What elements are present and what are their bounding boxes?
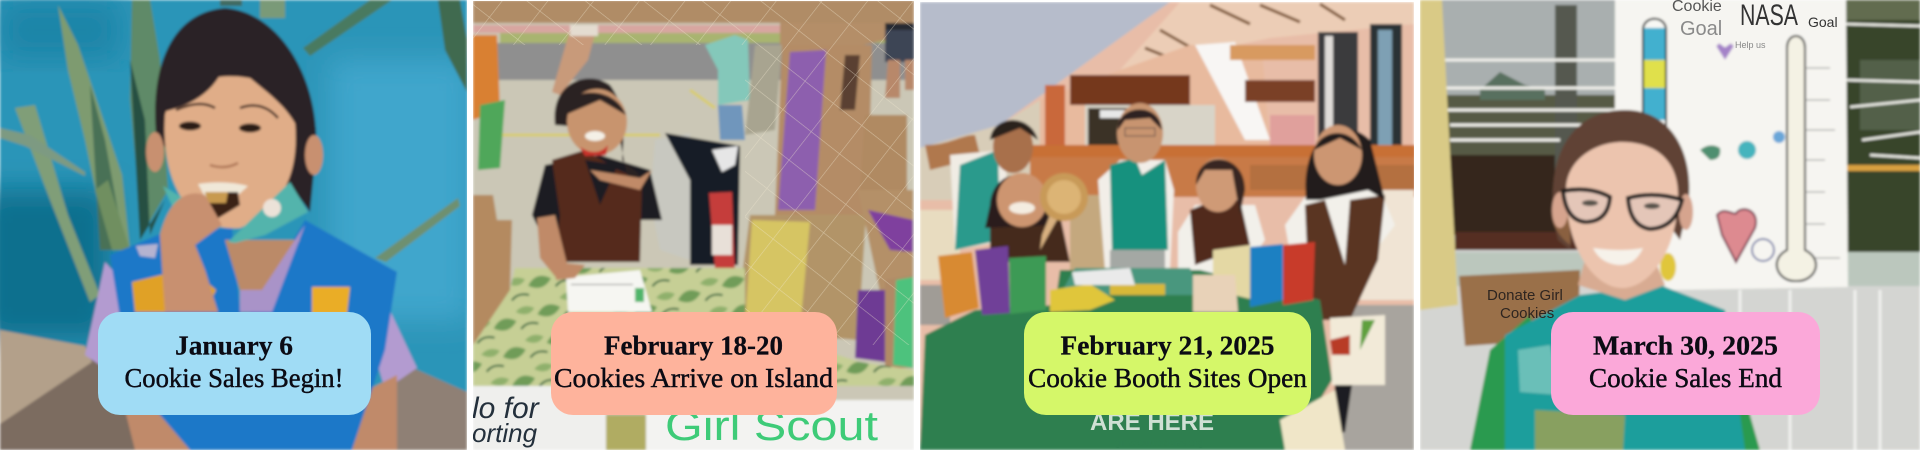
text: February 21, 2025 date: February 21, 2025 xyxy=(1060,330,1274,360)
text: table cloth print xyxy=(1090,409,1214,449)
smile xyxy=(1593,248,1643,265)
text: poster and sign lettering: Help us xyxy=(1735,40,1766,50)
pale upper wall xyxy=(920,2,1170,148)
leaves xyxy=(58,5,130,250)
mouth and cookie xyxy=(198,182,248,197)
mask xyxy=(163,182,308,243)
red cookie box xyxy=(709,192,735,281)
paper and pencils xyxy=(1072,268,1135,285)
chair xyxy=(653,135,690,258)
text: hand lettered signs: orting xyxy=(472,418,538,448)
stacked boxes at right xyxy=(860,115,907,190)
poster xyxy=(1615,0,1848,290)
top cardboard xyxy=(473,0,914,23)
panel: January 6 photo of girl eating a cookie xyxy=(0,0,470,450)
cookie cases behind xyxy=(1070,195,1108,270)
panel: March 30 girl with thermometer goal poster xyxy=(1420,0,1920,450)
donate sign xyxy=(1459,270,1580,346)
neck and collar xyxy=(225,240,300,292)
panel: February 21 mall booth with five girls xyxy=(920,2,1415,450)
cork board xyxy=(1420,0,1458,310)
balcony xyxy=(1030,145,1415,157)
wall band xyxy=(1455,252,1920,286)
ears xyxy=(146,132,164,172)
panel: February booth photo with cardboard boxes and net xyxy=(472,0,914,450)
face xyxy=(1566,142,1678,288)
text: Cookie Sales End: Cookie Sales End xyxy=(1589,362,1782,393)
vest and sleeves xyxy=(1470,315,1560,450)
text: poster and sign lettering xyxy=(1487,0,1838,322)
atrium walls xyxy=(1040,45,1270,150)
shirt xyxy=(84,260,122,366)
text: table cloth print: ARE HERE xyxy=(1090,409,1214,436)
legs below poster xyxy=(1330,385,1352,435)
glasses xyxy=(1563,189,1610,222)
big box with purple stripe xyxy=(775,45,872,215)
text: poster and sign lettering: Goal xyxy=(1808,14,1838,30)
face xyxy=(165,76,296,228)
callout: January 6 xyxy=(98,312,371,415)
text: poster and sign lettering: Donate Girl xyxy=(1487,287,1563,304)
siding xyxy=(1420,286,1920,450)
text: poster and sign lettering: Cookies xyxy=(1500,305,1554,322)
hair xyxy=(155,8,316,212)
text: January 6 date: January 6 xyxy=(175,330,293,360)
text: hand lettered signs xyxy=(473,396,878,448)
girl xyxy=(530,153,664,230)
pedestrians xyxy=(552,30,596,95)
girl 4 with brown vest xyxy=(1178,205,1265,275)
text: February 18-20 date: February 18-20 xyxy=(604,330,783,360)
boxes on the left xyxy=(473,35,500,120)
callout: February 21, 2025 xyxy=(1024,312,1311,415)
text: Cookies Arrive on Island: Cookies Arrive on Island xyxy=(554,362,833,393)
ears xyxy=(1552,192,1568,228)
cardboard box with yellow panel xyxy=(735,215,866,340)
callout: February 18-20 xyxy=(551,312,837,415)
ceiling stripes xyxy=(1120,2,1414,70)
windows at right xyxy=(1318,32,1358,162)
store poster at right xyxy=(1330,315,1385,385)
text: March 30, 2025 date: March 30, 2025 xyxy=(1593,330,1778,360)
callout: March 30, 2025 xyxy=(1551,312,1820,415)
ground xyxy=(0,359,136,450)
cookie boxes right xyxy=(1213,245,1255,300)
table cloth xyxy=(920,270,1332,450)
text: Cookie Booth Sites Open: Cookie Booth Sites Open xyxy=(1028,362,1307,393)
floor xyxy=(1340,305,1414,450)
text: Cookie Sales Begin: Cookie Sales Begin! xyxy=(124,362,344,393)
patches xyxy=(132,268,216,312)
neck xyxy=(1578,260,1665,300)
white signs xyxy=(473,386,606,450)
giant cookie paddle xyxy=(1040,215,1058,250)
thermometer right xyxy=(1777,36,1816,281)
thermometer left xyxy=(1643,19,1666,140)
table with leaf print xyxy=(473,268,914,386)
right window xyxy=(1846,0,1920,252)
vest xyxy=(110,228,240,450)
girl 1 with vest xyxy=(925,135,980,170)
hand xyxy=(160,193,222,312)
hair xyxy=(1553,110,1689,250)
text: hand lettered signs: lo for xyxy=(472,392,540,425)
clipboard xyxy=(566,270,652,312)
girl 2 with brown vest xyxy=(990,215,1070,262)
net over the booth xyxy=(473,0,914,345)
arms xyxy=(124,415,192,450)
girl 3 centre with green vest xyxy=(1098,160,1174,270)
girl 5 with brown vest and long hair xyxy=(1285,190,1395,310)
text: table cloth print: girlscoutcookies.org xyxy=(1115,438,1203,449)
text: poster and sign lettering: Goal xyxy=(1680,18,1722,40)
doodles xyxy=(1718,45,1732,56)
lower wall xyxy=(1350,190,1414,300)
text: hand lettered signs: Girl Scout xyxy=(665,402,878,449)
cookie boxes left xyxy=(938,252,979,318)
